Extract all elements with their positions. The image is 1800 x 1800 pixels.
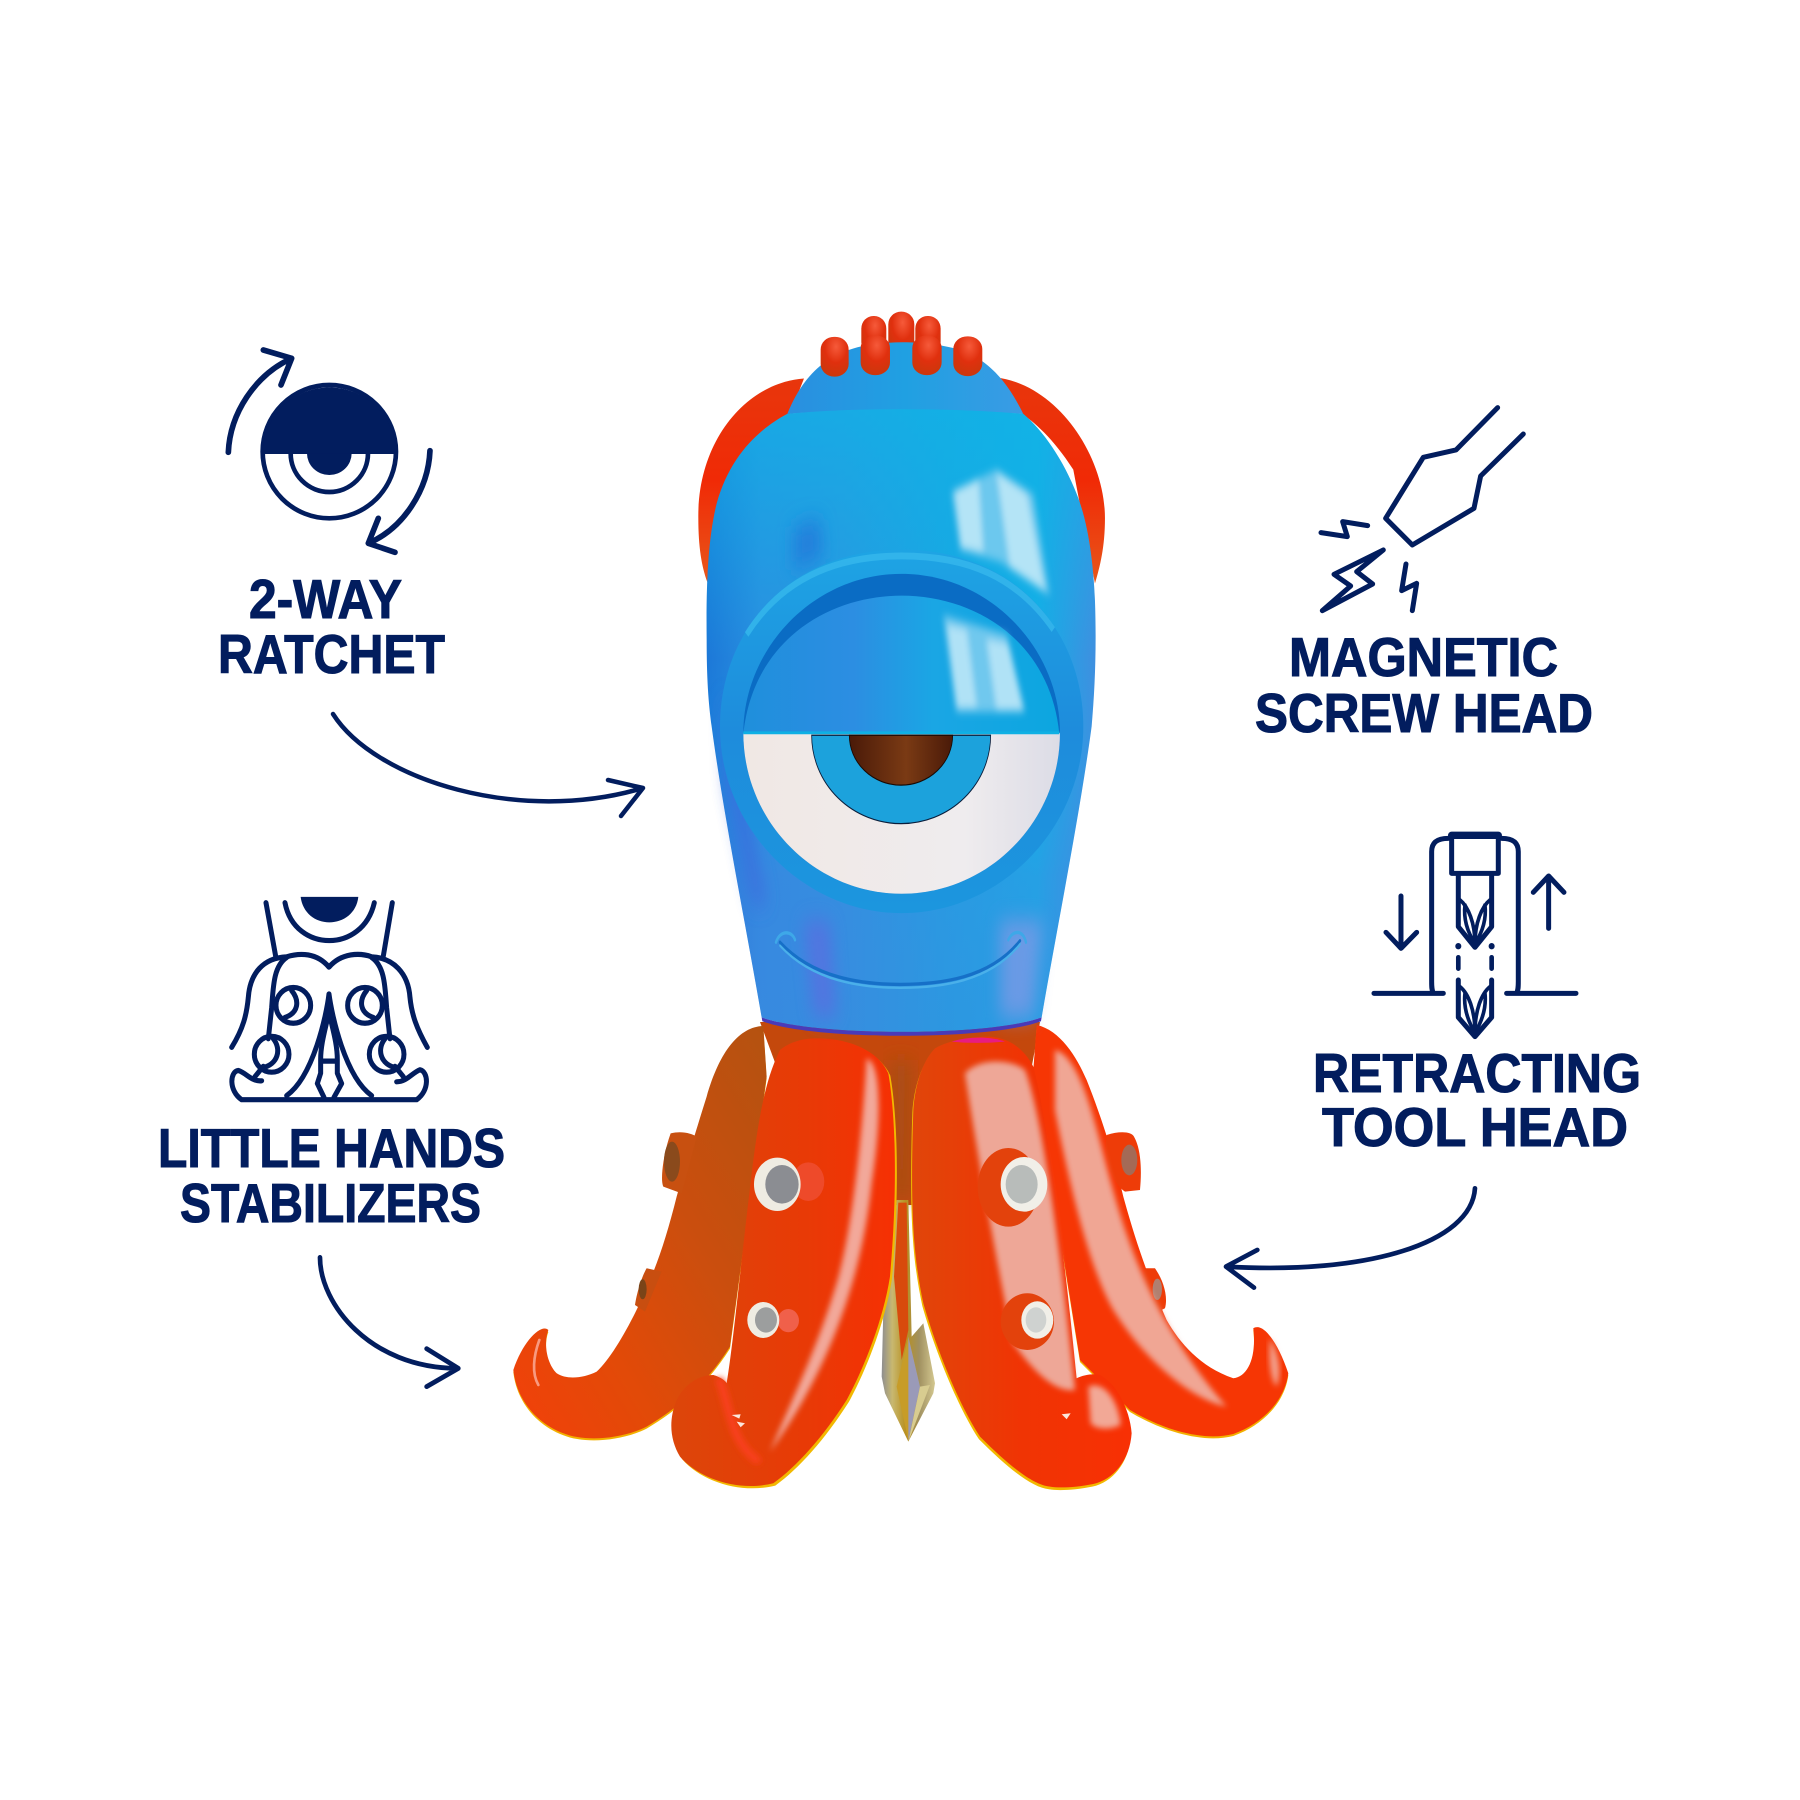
hook highlight [534,1340,539,1385]
window reflection on shell [952,470,1050,596]
feature: magnetic screw head [1255,408,1593,744]
back right highlight [1055,1050,1227,1407]
dark centre strip [890,1060,912,1200]
front right tentacle [911,1037,1132,1490]
feature: 2-way ratchet: RATCHET [218,623,445,685]
label: 2-way ratchet: 2-WAY [249,568,402,630]
body shell [707,409,1096,1032]
lower band purple reflections [723,688,1043,1017]
top magenta tint [952,1038,1005,1043]
label: retracting tool head: RETRACTING [1313,1042,1641,1104]
eyelid edge [743,730,1059,736]
icon: retracting bit [1374,835,1576,1037]
rim highlight [747,556,1053,634]
icon: ratchet eye with rotating arrows [228,350,430,552]
eyelid [743,596,1059,734]
lower hole [778,1309,799,1332]
eye socket rim [720,550,1083,913]
back knobs [861,312,941,355]
nub upper [662,1132,697,1193]
tentacle hub shadow [760,1022,1040,1205]
label: little hands stabilizers: LITTLE HANDS [158,1117,505,1179]
red handle left [698,379,804,582]
eyeball white [743,733,1060,894]
front knobs [821,335,982,377]
front left highlight [770,1058,879,1452]
socket shadow [743,574,1060,894]
nub upper [1106,1132,1141,1192]
upper hole [792,1162,824,1201]
toy: tentacle base [513,1022,1288,1490]
hook highlight [1269,1338,1279,1387]
dome [787,342,1023,414]
feature: little hands stabilizers [158,897,505,1387]
feature: retracting tool head [1226,835,1641,1288]
icon: tentacle stabilizers [232,897,427,1100]
feature: magnetic screw head: SCREW HEAD [1255,682,1593,744]
front right highlight [965,1062,1075,1390]
hook crease [720,1382,757,1460]
body shading [707,409,1096,1032]
nub lower [635,1268,662,1312]
pupil [849,735,953,785]
upper hole [978,1148,1039,1227]
back left tentacle [513,1026,767,1440]
red handle right [997,378,1105,584]
front left tentacle [671,1038,897,1488]
toy: blue head with eye [698,312,1105,1036]
icon: screwdriver with sparks [1321,408,1523,611]
back right tentacle [1033,1025,1288,1438]
arrow to tentacles [1226,1188,1475,1288]
feature: little hands stabilizers: STABILIZERS [180,1172,481,1234]
iris [812,735,991,824]
smile [776,932,1026,988]
hook highlight [1088,1385,1121,1429]
eyelid reflection [943,615,1025,712]
nub lower [1144,1268,1166,1312]
screwdriver bit [882,1200,935,1442]
dark reflection on shell [793,518,823,571]
label: magnetic screw head: MAGNETIC [1289,626,1558,688]
base rim [762,1017,1042,1036]
feature: retracting tool head: TOOL HEAD [1322,1096,1628,1158]
arrow to tentacles [320,1257,458,1387]
lower hole [1001,1293,1054,1350]
arrow to head [333,714,643,816]
feature: 2-way ratchet [218,350,643,816]
